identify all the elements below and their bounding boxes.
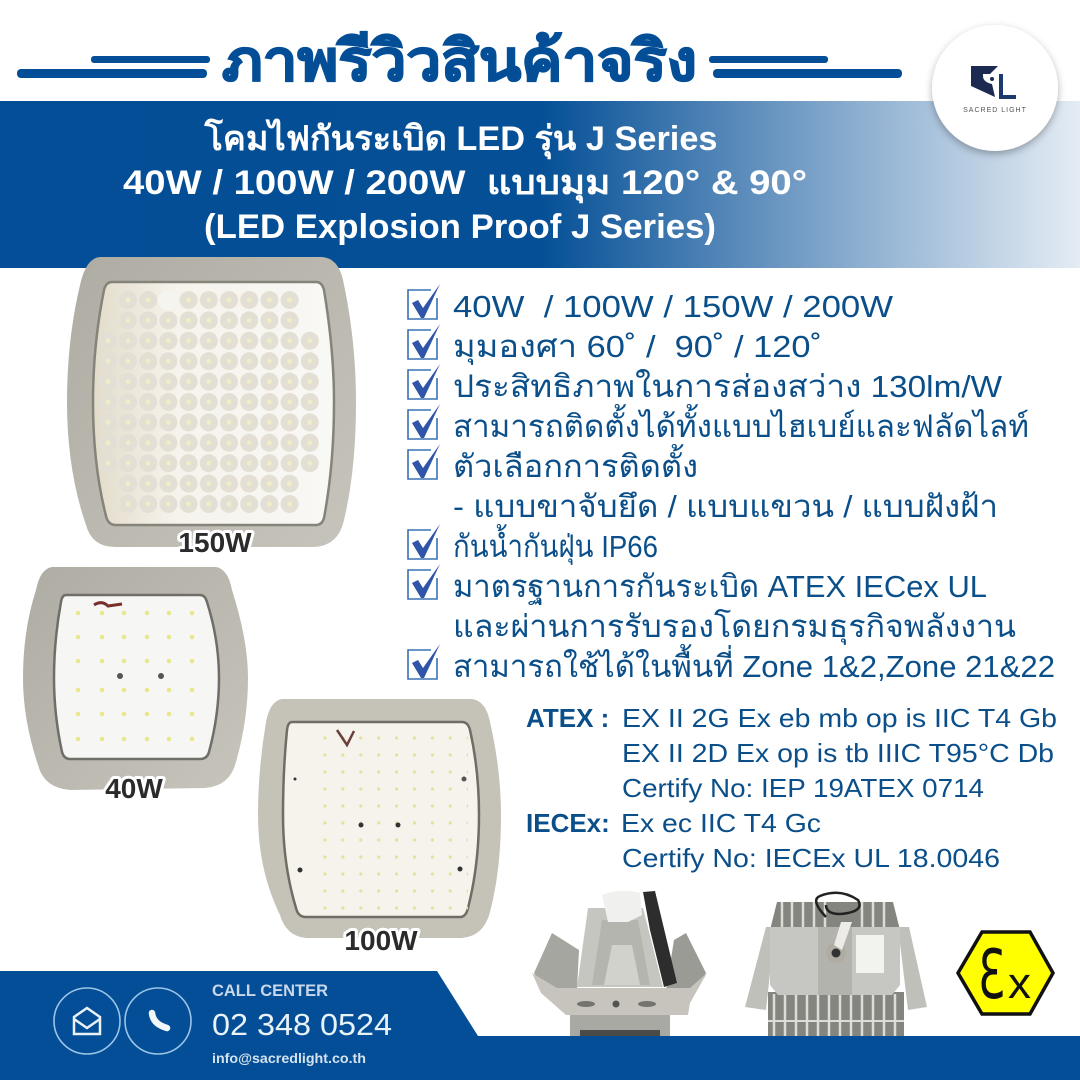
features list: สามารถติดตั้งได้ทั้งแบบไฮเบย์และฟลัดไลท์	[453, 404, 1029, 444]
certifications: IECEx:	[526, 808, 610, 838]
contact details: 02 348 0524	[212, 1007, 392, 1042]
icon: phone	[125, 988, 191, 1054]
certifications: Ex ec IIC T4 Gc	[621, 808, 821, 838]
subtitle: (LED Explosion Proof J Series)	[204, 208, 716, 246]
header band	[0, 101, 1080, 268]
logo: SACRED LIGHT	[963, 107, 1027, 114]
contact details	[212, 981, 392, 1066]
certifications: Certify No: IEP 19ATEX 0714	[622, 773, 984, 803]
certifications: EX II 2G Ex eb mb op is IIC T4 Gb	[622, 703, 1057, 733]
features list: ประสิทธิภาพในการส่องสว่าง 130lm/W	[453, 369, 1003, 404]
photo: fixture side view	[532, 891, 707, 1037]
icon: Ex hazard mark: x	[1008, 959, 1031, 1008]
features list: ตัวเลือกการติดตั้ง	[453, 444, 698, 484]
subtitle: โคมไฟกันระเบิด LED รุ่น J Series	[203, 118, 717, 160]
title: ภาพรีวิวสินค้าจริง	[222, 29, 697, 92]
features list: กันน้ำกันฝุ่น IP66	[453, 524, 658, 566]
icon: Ex hazard mark	[958, 932, 1053, 1015]
photo: fixture rear view	[745, 893, 927, 1037]
certifications: EX II 2D Ex op is tb IIIC T95°C Db	[622, 738, 1054, 768]
certifications	[526, 703, 1057, 873]
subtitle	[123, 118, 807, 246]
features list: - แบบขาจับยึด / แบบแขวน / แบบฝังฝ้า	[453, 489, 998, 524]
contact details: info@sacredlight.co.th	[212, 1050, 366, 1066]
certifications: Certify No: IECEx UL 18.0046	[622, 843, 1000, 873]
footer band	[0, 971, 1080, 1080]
label: 40W: 40W	[105, 773, 163, 804]
features list	[453, 289, 1055, 684]
label: 100W: 100W	[344, 925, 418, 956]
photo: 40W lamp	[23, 567, 248, 804]
photo: 100W lamp	[258, 699, 501, 956]
features list: 40W / 100W / 150W / 200W	[453, 289, 894, 324]
features list: สามารถใช้ได้ในพื้นที่ Zone 1&2,Zone 21&22	[453, 644, 1055, 684]
checklist icons	[408, 284, 440, 679]
certifications: ATEX :	[526, 703, 609, 733]
photo: 150W lamp	[67, 257, 356, 558]
icon: mail	[54, 988, 120, 1054]
logo	[932, 25, 1058, 151]
icon: Ex hazard mark: Ɛ	[978, 936, 1005, 1015]
features list: มาตรฐานการกันระเบิด ATEX IECex UL	[453, 569, 987, 605]
label: 150W: 150W	[178, 527, 252, 558]
contact details: CALL CENTER	[212, 981, 328, 1000]
features list: และผ่านการรับรองโดยกรมธุรกิจพลังงาน	[453, 609, 1016, 646]
features list: มุมองศา 60˚ / 90˚ / 120˚	[453, 329, 822, 366]
title	[17, 29, 902, 92]
subtitle: 40W / 100W / 200W แบบมุม 120° & 90°	[123, 164, 807, 204]
